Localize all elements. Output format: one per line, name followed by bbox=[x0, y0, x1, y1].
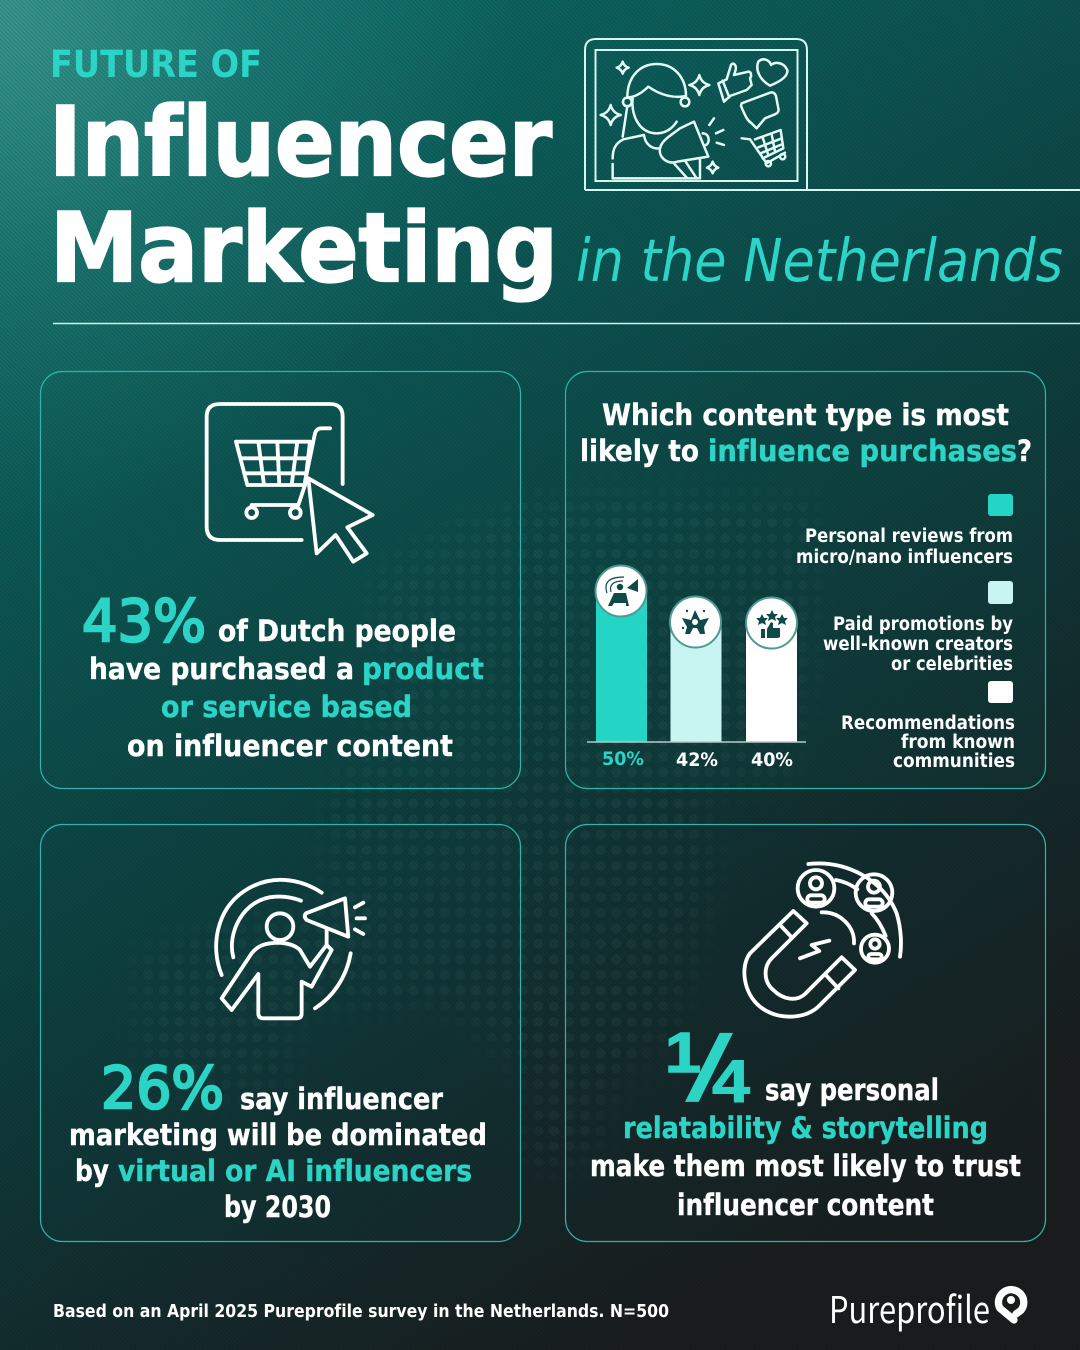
heading: influencer: Influencer bbox=[49, 88, 552, 198]
text: description: on influencer content bbox=[127, 729, 453, 763]
logo: pureprofile: Pureprofile bbox=[829, 1280, 990, 1334]
text: description: relatability & storytelling bbox=[623, 1111, 988, 1145]
legend: Paid promotions by bbox=[833, 614, 1013, 635]
icon: shopping cart and cursor bbox=[207, 404, 373, 562]
icon: person with megaphone bbox=[596, 566, 646, 616]
panel: one quarter storytelling bbox=[566, 824, 1046, 1242]
legend: or celebrities bbox=[891, 654, 1013, 675]
icon: magnet attracting people bbox=[744, 863, 901, 1017]
stat: 43%: 43% bbox=[82, 587, 206, 655]
text: description: marketing will be dominated bbox=[69, 1118, 487, 1152]
text: description bbox=[590, 1073, 1021, 1222]
text: description: make them most likely to trust bbox=[590, 1149, 1021, 1183]
bar chart bbox=[587, 566, 806, 771]
chart heading: ? bbox=[1017, 434, 1032, 468]
panel: content type chart bbox=[566, 372, 1046, 788]
value labels: 50% bbox=[602, 748, 644, 770]
legend bbox=[796, 494, 1015, 772]
text: description: by 2030 bbox=[224, 1190, 331, 1224]
icon: star with person bbox=[670, 596, 721, 648]
stat: one quarter: 1 bbox=[665, 1021, 701, 1085]
text: description: have purchased a bbox=[89, 652, 354, 686]
text: description: or service based bbox=[161, 690, 412, 724]
legend: well-known creators bbox=[823, 634, 1013, 655]
title bbox=[49, 43, 1063, 304]
legend: Personal reviews from bbox=[805, 526, 1013, 547]
footnote: Based on an April 2025 Pureprofile survey in the Netherlands. N=500 bbox=[53, 1302, 669, 1322]
header rule bbox=[53, 322, 1080, 324]
chart heading: Which content type is most bbox=[602, 398, 1009, 432]
text: description: say personal bbox=[765, 1073, 939, 1107]
chart heading: likely to bbox=[580, 434, 699, 468]
text: description: of Dutch people bbox=[218, 614, 456, 648]
heading: marketing: Marketing bbox=[50, 194, 558, 304]
legend: from known bbox=[901, 732, 1015, 753]
value labels: 42% bbox=[676, 749, 718, 771]
stat: one quarter: 4 bbox=[712, 1048, 751, 1115]
panel: 26% virtual influencers bbox=[40, 824, 520, 1242]
icon: person with megaphone bbox=[216, 880, 365, 1018]
eyebrow: future of: FUTURE OF bbox=[50, 43, 262, 86]
header illustration frame bbox=[585, 39, 1080, 190]
icon: location pin bbox=[998, 1290, 1024, 1320]
value labels: 40% bbox=[751, 749, 793, 771]
stat: one quarter bbox=[665, 1016, 751, 1121]
legend: communities bbox=[893, 751, 1015, 772]
panel: 43% purchased bbox=[40, 372, 520, 788]
text: description: by bbox=[75, 1154, 109, 1188]
text: description: virtual or AI influencers bbox=[118, 1154, 472, 1188]
stat: 26%: 26% bbox=[101, 1054, 224, 1122]
text: description bbox=[89, 614, 484, 763]
legend: Recommendations bbox=[841, 713, 1015, 734]
value labels bbox=[602, 748, 793, 771]
text: description: say influencer bbox=[240, 1082, 444, 1116]
text: description bbox=[69, 1082, 487, 1224]
chart heading bbox=[580, 398, 1032, 468]
icon: influencer with megaphone bbox=[601, 59, 787, 178]
text: description: product bbox=[362, 652, 484, 686]
text: description: influencer content bbox=[677, 1188, 934, 1222]
chart heading: influence purchases bbox=[708, 434, 1017, 468]
icon: stars and thumbs up bbox=[746, 598, 797, 648]
stat: one quarter: / bbox=[685, 1016, 735, 1121]
legend: micro/nano influencers bbox=[796, 547, 1013, 568]
